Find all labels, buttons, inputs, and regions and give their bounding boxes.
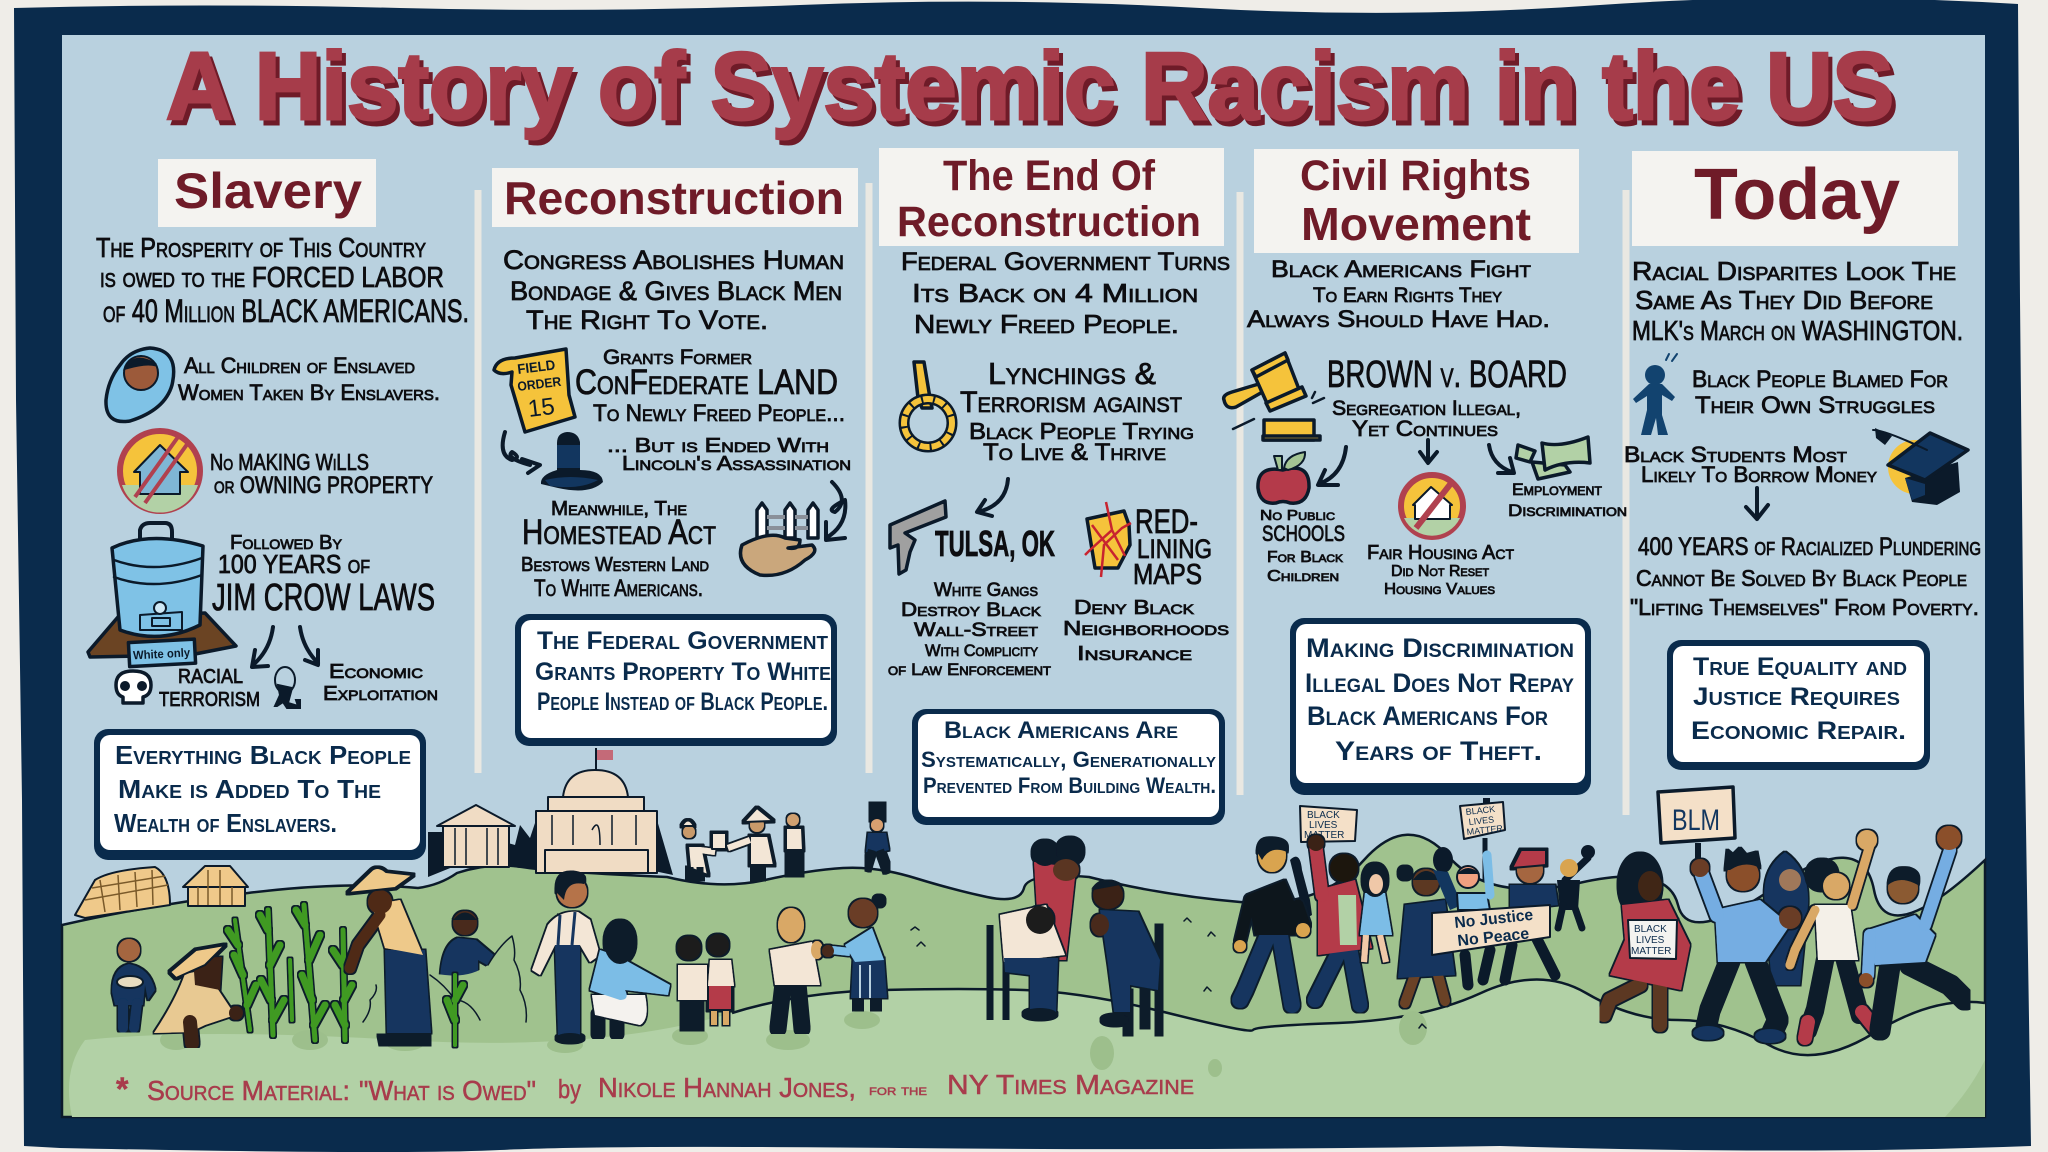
intro text: is owed to the FORCED LABOR [100, 262, 444, 294]
heading: Reconstruction [897, 198, 1201, 246]
source credit: Source Material: [147, 1075, 350, 1106]
arrow to hat [503, 432, 540, 473]
intro text: To Earn Rights They [1313, 284, 1502, 307]
woman in navy coat [1398, 866, 1455, 1003]
callout: Slavery [94, 729, 426, 860]
text: white gangs: of Law Enforcement [888, 660, 1052, 679]
intro text: Racial Disparites Look The [1632, 256, 1956, 286]
intro text: Newly Freed People. [914, 309, 1179, 339]
text: deny insurance: Insurance [1077, 643, 1192, 665]
text: white gangs: Destroy Black [901, 600, 1041, 621]
text: confederate land: ConFederate LAND [575, 363, 838, 402]
panel: The End of Reconstruction [879, 148, 1230, 825]
icon: swaddled baby [106, 348, 174, 422]
icon: graduation cap [1873, 428, 1968, 505]
marchers' legs behind banner [1465, 935, 1555, 985]
text: employment discrimination [1508, 480, 1627, 520]
text: Jim Crow laws [212, 532, 435, 619]
text: no public schools [1260, 507, 1345, 585]
intro text: Its Back on 4 Million [912, 278, 1198, 308]
icon: Field Order 15 scroll: ORDER [517, 374, 563, 394]
text: Brown v. Board: Segregation Illegal, [1332, 397, 1521, 420]
source credit: NY Times Magazine [947, 1069, 1194, 1100]
text: economic exploitation: Economic [329, 661, 423, 683]
icon: Lincoln top hat [541, 432, 603, 490]
raised Black Lives Matter sign and child: BLACK [1465, 804, 1496, 817]
text: Lincoln's assassination: Lincoln's Assassination [622, 453, 851, 475]
man in black sweater [1234, 838, 1310, 1005]
text: Homestead Act: Meanwhile, The [551, 498, 687, 520]
text: no wills: No MAKING WiLLS [210, 449, 369, 475]
scene: farm huts [75, 866, 248, 918]
text: economic exploitation: Exploitation [323, 683, 438, 705]
icon: water cooler on table: White only [133, 645, 191, 662]
heading: Today [1694, 155, 1900, 235]
man in blue with raised fist [1859, 826, 1965, 1030]
text: Lincoln's assassination [607, 435, 851, 475]
text: deny insurance: Deny Black [1074, 597, 1195, 619]
arrows to terrorism and exploitation [252, 627, 318, 667]
panel: Today [1624, 151, 1981, 770]
intro text: Black Americans Fight [1271, 256, 1531, 283]
woman in white tank [1790, 830, 1877, 1038]
text: confederate land [575, 346, 845, 427]
callout [1667, 640, 1930, 770]
intro text [901, 248, 1230, 339]
icon: skull [116, 671, 151, 703]
icon: blamed person [1633, 354, 1677, 435]
text: Jim Crow laws: JIM CROW LAWS [212, 577, 435, 619]
man in blue with BLM sign [1691, 848, 1801, 1043]
text: blamed: Black People Blamed For [1692, 366, 1948, 393]
intro text: Bondage & Gives Black Men [510, 276, 842, 306]
heading: The End Of [943, 152, 1156, 200]
man in suspenders [532, 872, 600, 1043]
callout: Illegal Does Not Repay [1305, 668, 1574, 698]
raised Black Lives Matter sign and child: LIVES [1468, 814, 1495, 827]
icon: Field Order 15 scroll: 15 [526, 393, 556, 423]
text: white gangs: Wall-Street [914, 620, 1038, 641]
text: borrow money: Likely To Borrow Money [1641, 462, 1877, 487]
scene: capitol and government buildings [428, 748, 673, 877]
heading [1254, 149, 1579, 253]
BLM sign: BLM [1672, 804, 1720, 837]
text: no public schools: Children [1267, 568, 1339, 585]
intro text: Always Should Have Had. [1247, 306, 1550, 333]
icon: hand with fence [740, 503, 818, 575]
text: racial terrorism [159, 666, 260, 711]
text: white gangs [888, 580, 1052, 679]
text: red-lining maps: LINING [1137, 534, 1212, 564]
Black Lives Matter sign: MATTER [1304, 830, 1344, 841]
source credit [116, 1069, 1194, 1107]
icon: apple [1258, 452, 1309, 503]
text: 400 years: Cannot Be Solved By Black People [1636, 565, 1967, 591]
text: white gangs: White Gangs [934, 580, 1038, 601]
icon: noose [904, 362, 952, 447]
intro text [1632, 256, 1963, 346]
woman in red dress: MATTER [1631, 946, 1671, 957]
heading: Slavery: Slavery [174, 163, 362, 219]
source credit: * [116, 1071, 129, 1107]
text: Brown v. Board [1327, 354, 1567, 441]
panel: Civil Rights Movement [1224, 149, 1627, 795]
chair left [990, 925, 1006, 1020]
Black Lives Matter sign [1300, 806, 1357, 842]
scene: farm workers and corn [112, 868, 463, 1045]
callout: True Equality and [1693, 653, 1907, 681]
text: Brown v. Board: Yet Continues [1352, 416, 1498, 441]
man in red jacket [1308, 835, 1372, 1005]
text: confederate land: Grants Former [603, 346, 752, 369]
back hill [62, 835, 1985, 1117]
corn stalks [228, 905, 463, 1045]
scene: Lincoln figure [866, 803, 889, 872]
callout: Prevented From Building Wealth. [923, 773, 1216, 798]
intro text: Congress Abolishes Human [503, 245, 844, 275]
arrow to Tulsa [977, 479, 1008, 516]
text: children taken [178, 353, 440, 405]
bald man greeting [770, 908, 823, 1028]
text: borrow money [1624, 442, 1877, 487]
arrows from Brown v. Board [1318, 440, 1514, 485]
arrow to hand [826, 482, 845, 540]
hooded figure [1764, 852, 1808, 985]
text: lynchings: To Live & Thrive [983, 439, 1166, 466]
text: no public schools: SCHOOLS [1262, 521, 1345, 546]
callout: Making Discrimination [1306, 633, 1574, 663]
raised Black Lives Matter sign and child: MATTER [1466, 823, 1504, 837]
text: 400 years: "Lifting Themselves" From Poverty. [1630, 594, 1979, 620]
title: A History of Systemic Racism in the US [166, 33, 1894, 140]
icon: running figure [275, 667, 300, 708]
panel: Reconstruction [492, 168, 858, 746]
raised Black Lives Matter sign and child [1457, 798, 1505, 910]
text: Homestead Act: Bestows Western Land [521, 554, 709, 576]
intro text: The Right To Vote. [526, 305, 768, 335]
woman in red dress [1604, 853, 1690, 1025]
heading [1632, 151, 1958, 246]
text: fair housing act: Did Not Reset [1391, 563, 1489, 580]
heading: Movement [1301, 198, 1531, 250]
callout: The Federal Government [537, 627, 828, 655]
callout [1290, 618, 1591, 795]
icon: water cooler on table [88, 523, 236, 667]
text: Homestead Act [521, 498, 716, 602]
icon: gavel [1224, 353, 1324, 440]
icon: Field Order 15 scroll: FIELD [516, 356, 556, 377]
shadow figure [1290, 857, 1312, 920]
farmer in straw hat [348, 868, 431, 1045]
intro text: Same As They Did Before [1635, 285, 1933, 315]
callout: Systematically, Generationally [921, 747, 1216, 772]
intro text: The Prosperity of This Country [96, 232, 426, 263]
heading: Civil Rights [1300, 152, 1531, 200]
text: fair housing act: Housing Values [1384, 581, 1495, 598]
text: no public schools: For Black [1267, 549, 1344, 566]
girl in blue dress [1360, 863, 1392, 962]
text: no wills [210, 449, 433, 499]
text: racial terrorism: TERRORISM [159, 689, 260, 711]
background marcher [1433, 847, 1462, 910]
text: white gangs: With Complicity [925, 641, 1038, 660]
text: 400 years: 400 YEARS of Racialized Plundering [1638, 533, 1981, 561]
text: no public schools: No Public [1260, 507, 1335, 524]
source credit: by [558, 1074, 581, 1104]
scene: bush and boy picking [363, 911, 526, 1032]
panel: Slavery [88, 159, 469, 711]
kneeling woman [590, 920, 670, 1033]
text: blamed: Their Own Struggles [1695, 392, 1935, 419]
No Justice No Peace banner: No Peace [1457, 926, 1530, 950]
intro text: MLK's March on WASHINGTON. [1632, 315, 1963, 346]
source credit: for the [869, 1082, 927, 1099]
heading: Slavery [158, 159, 376, 227]
small figure with raised fist [1557, 845, 1595, 928]
intro text [503, 245, 844, 335]
BLM sign [1658, 787, 1735, 875]
text: borrow money: Black Students Most [1624, 442, 1847, 467]
seated man with head in hands [1000, 905, 1065, 1020]
man in red cap [1510, 850, 1558, 910]
text: Brown v. Board: BROWN v. BOARD [1327, 354, 1567, 396]
scene: marchers group one [1234, 798, 1595, 1005]
kneeling woman in straw hat [154, 945, 243, 1043]
callout [515, 614, 837, 746]
text: employment discrimination: Discrimination [1508, 501, 1627, 520]
intro text: Federal Government Turns [901, 248, 1230, 276]
woman in red dress: BLACK [1634, 924, 1667, 935]
Black Lives Matter sign: BLACK [1307, 810, 1340, 821]
No Justice No Peace banner: No Justice [1454, 907, 1534, 932]
text: racial terrorism: RACIAL [178, 666, 243, 688]
text: deny insurance [1063, 597, 1229, 665]
seated man in navy [1091, 881, 1160, 1035]
child with bowl [112, 939, 155, 1028]
heading: Reconstruction: Reconstruction [504, 172, 844, 224]
text: Homestead Act: Homestead Act [522, 513, 716, 552]
text: red-lining maps: RED- [1135, 503, 1198, 541]
text: no wills: or OWNING PROPERTY [214, 472, 433, 499]
text: Jim Crow laws: 100 YEARS of [218, 549, 370, 579]
text: Homestead Act: To White Americans. [534, 575, 703, 602]
callout: Slavery: Make is Added To The [118, 774, 381, 804]
text: lynchings [960, 356, 1194, 466]
icon: Field Order 15 scroll [494, 349, 575, 432]
source credit: Nikole Hannah Jones, [598, 1072, 856, 1103]
callout [912, 709, 1225, 825]
text: blamed [1692, 366, 1948, 419]
woman in red dress: LIVES [1636, 935, 1665, 946]
callout: Years of Theft. [1335, 736, 1542, 766]
text: fair housing act [1367, 542, 1514, 598]
front hill [69, 980, 1985, 1117]
callout: Justice Requires [1693, 683, 1900, 711]
text: lynchings: Lynchings & [988, 356, 1156, 391]
text: children taken: All Children of Enslaved [184, 353, 415, 378]
heading [879, 148, 1224, 246]
text: Lincoln's assassination: ... But is Ended With [607, 435, 829, 457]
text: fair housing act: Fair Housing Act [1367, 542, 1514, 564]
intro text: of 40 Million BLACK AMERICANS. [103, 293, 469, 329]
No Justice No Peace banner [1432, 905, 1550, 955]
icon: no property [120, 431, 200, 513]
text: confederate land: To Newly Freed People... [593, 400, 845, 427]
arrow down [1746, 488, 1768, 519]
text: red-lining maps: MAPS [1133, 559, 1202, 591]
scene: grieving group [990, 837, 1160, 1035]
text: deny insurance: Neighborhoods [1063, 618, 1229, 640]
scene: marchers group two [1604, 787, 1965, 1043]
callout: Economic Repair. [1691, 717, 1906, 745]
text: Tulsa: TULSA, OK [935, 523, 1055, 564]
scene: freed family [532, 872, 887, 1043]
text: employment discrimination: Employment [1512, 480, 1603, 499]
callout: Slavery: Wealth of Enslavers. [114, 808, 337, 838]
callout: Slavery: Everything Black People [115, 740, 411, 770]
Black Lives Matter sign: LIVES [1309, 820, 1338, 831]
text: children taken: Women Taken By Enslavers. [178, 380, 440, 405]
scene: land grant figures [682, 808, 803, 880]
callout: People Instead of Black People. [537, 688, 828, 716]
callout: Grants Property To White [535, 658, 831, 686]
icon: money [1516, 437, 1590, 479]
icon: no housing [1401, 475, 1463, 537]
source credit: "What is Owed" [359, 1075, 536, 1106]
text: 400 years [1630, 533, 1981, 620]
icon: gun [890, 501, 946, 574]
text: lynchings: Black People Trying [969, 418, 1194, 444]
intro text [96, 232, 469, 329]
intro text [1247, 256, 1550, 333]
text: red-lining maps [1133, 503, 1212, 591]
two children [677, 934, 734, 1030]
text: Jim Crow laws: Followed By [230, 532, 343, 554]
standing woman in red [1032, 837, 1084, 960]
icon: redlining map [1085, 502, 1131, 577]
text: lynchings: Terrorism against [960, 386, 1182, 419]
text: economic exploitation [323, 661, 438, 705]
callout: Black Americans Are [944, 717, 1178, 744]
callout: Black Americans For [1307, 701, 1548, 731]
woman in blue [822, 895, 887, 1010]
